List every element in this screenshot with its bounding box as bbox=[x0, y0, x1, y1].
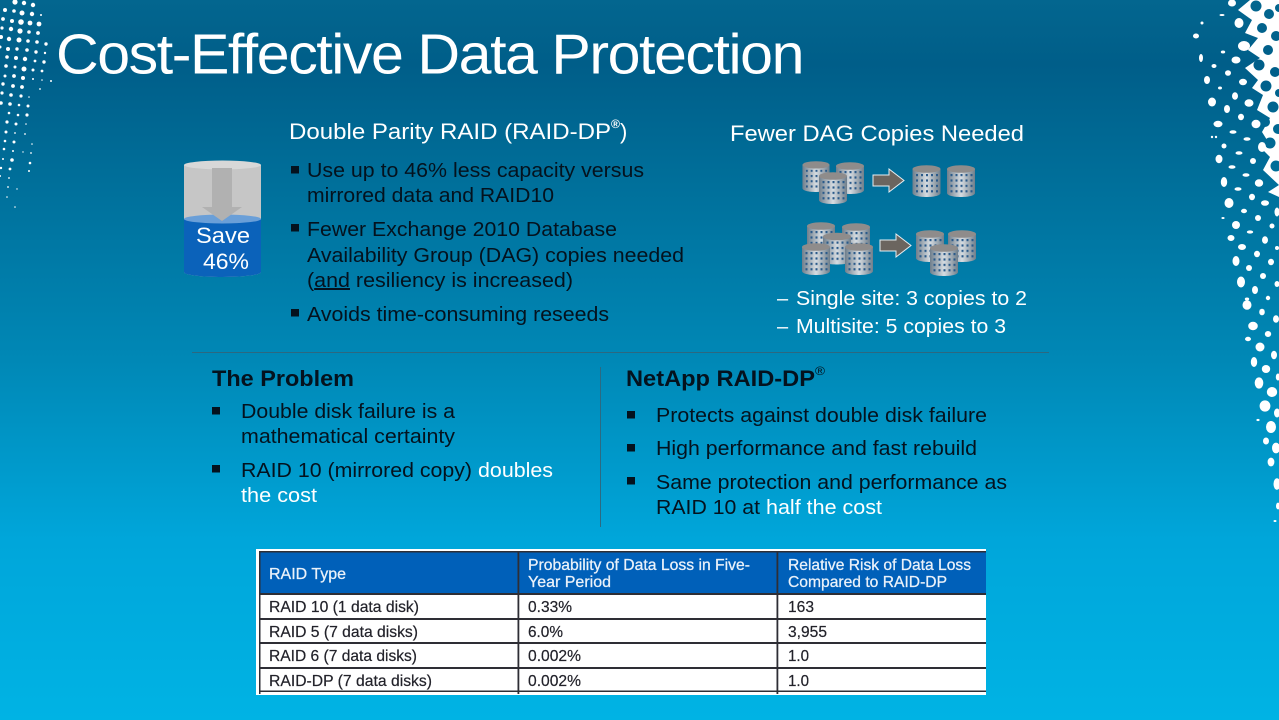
decorative dot pattern: right bbox=[1193, 0, 1279, 522]
row: RAID-DP bbox=[269, 673, 809, 690]
bullet: same protection: half the cost bbox=[766, 497, 882, 519]
row: RAID 5: 3,955 bbox=[788, 624, 827, 641]
table header: Probability of Data Loss in Five- bbox=[528, 557, 750, 574]
bullet: fewer copies: Fewer Exchange 2010 Database bbox=[307, 219, 617, 241]
row: RAID-DP: RAID-DP (7 data disks) bbox=[269, 673, 432, 690]
list: copies reduction: – bbox=[777, 316, 789, 338]
icon: two disks bbox=[912, 165, 975, 197]
panel: double parity RAID bbox=[289, 117, 684, 326]
row: RAID 6: RAID 6 (7 data disks) bbox=[269, 648, 417, 665]
bullet: double disk failure: Double disk failure is a bbox=[241, 401, 456, 423]
bullet: RAID 10 cost: RAID 10 (mirrored copy) bbox=[241, 460, 472, 482]
bullet: performance: High performance and fast rebuild bbox=[656, 438, 977, 460]
bullet: RAID 10 cost bbox=[212, 460, 553, 507]
bullet: capacity: Use up to 46% less capacity versus bbox=[307, 160, 644, 182]
icon: storage cylinder saving 46% bbox=[184, 160, 261, 277]
heading: double parity RAID: ® bbox=[611, 117, 620, 131]
row: RAID 6 bbox=[269, 648, 809, 665]
list: copies reduction bbox=[777, 288, 1027, 338]
bullet: fewer copies: (and resiliency is increased) bbox=[307, 270, 573, 292]
heading: NetApp RAID-DP: ® bbox=[815, 364, 825, 378]
row: RAID 6: 0.002% bbox=[528, 648, 581, 665]
heading: double parity RAID: ) bbox=[620, 119, 627, 144]
bullet: reseeds: Avoids time-consuming reseeds bbox=[307, 304, 609, 326]
panel: NetApp RAID-DP bbox=[626, 364, 1007, 519]
row: RAID 10: RAID 10 (1 data disk) bbox=[269, 599, 419, 616]
decorative dot pattern: left bbox=[0, 0, 52, 208]
icon: storage cylinder saving 46%: Save bbox=[196, 223, 250, 248]
table header bbox=[269, 557, 971, 591]
bullet: same protection: RAID 10 at bbox=[656, 497, 760, 519]
icon: storage cylinder saving 46%: 46% bbox=[203, 249, 249, 274]
icon: three disks result bbox=[916, 230, 976, 276]
panel: the problem bbox=[212, 366, 553, 507]
bullet: double disk failure bbox=[212, 401, 456, 448]
list: copies reduction: Multisite: 5 copies to 3 bbox=[796, 316, 1006, 338]
row: RAID 6: 1.0 bbox=[788, 648, 809, 665]
icon: three disks bbox=[802, 161, 864, 204]
bullet: RAID 10 cost: the cost bbox=[241, 485, 317, 507]
bullet: capacity bbox=[291, 160, 644, 207]
bullet: RAID 10 cost: doubles bbox=[478, 460, 553, 482]
title: Cost-Effective Data Protection bbox=[56, 22, 803, 86]
table header: RAID Type bbox=[269, 566, 346, 583]
icon: five disks bbox=[802, 222, 873, 275]
heading: the problem: The Problem bbox=[212, 366, 354, 391]
table: RAID data loss risk bbox=[256, 549, 986, 695]
heading: fewer DAG copies needed: Fewer DAG Copies Needed bbox=[730, 121, 1024, 146]
bullet: fewer copies bbox=[291, 219, 684, 292]
list: copies reduction: Single site: 3 copies to 2 bbox=[796, 288, 1027, 310]
row: RAID 10 bbox=[269, 599, 814, 616]
bullet: protects: Protects against double disk failure bbox=[656, 405, 987, 427]
heading: NetApp RAID-DP: NetApp RAID-DP bbox=[626, 366, 815, 391]
heading: double parity RAID: Double Parity RAID (RAID-DP bbox=[289, 119, 611, 144]
row: RAID 10: 163 bbox=[788, 599, 814, 616]
bullet: double disk failure: mathematical certainty bbox=[241, 426, 455, 448]
bullet: same protection bbox=[627, 472, 1007, 519]
table header: Compared to RAID-DP bbox=[788, 574, 947, 591]
bullet: same protection: Same protection and performance as bbox=[656, 472, 1007, 494]
row: RAID 10: 0.33% bbox=[528, 599, 572, 616]
row: RAID 5: RAID 5 (7 data disks) bbox=[269, 624, 418, 641]
row: RAID 5: 6.0% bbox=[528, 624, 563, 641]
bullet: capacity: mirrored data and RAID10 bbox=[307, 185, 554, 207]
arrow: multisite bbox=[880, 234, 911, 257]
panel: fewer DAG copies bbox=[730, 121, 1027, 338]
table header: Year Period bbox=[528, 574, 611, 591]
bullet: fewer copies: Availability Group (DAG) copies needed bbox=[307, 245, 684, 267]
row: RAID 5 bbox=[269, 624, 827, 641]
arrow: single site bbox=[873, 169, 904, 192]
row: RAID-DP: 0.002% bbox=[528, 673, 581, 690]
table header: Relative Risk of Data Loss bbox=[788, 557, 971, 574]
row: RAID-DP: 1.0 bbox=[788, 673, 809, 690]
list: copies reduction: – bbox=[777, 288, 789, 310]
